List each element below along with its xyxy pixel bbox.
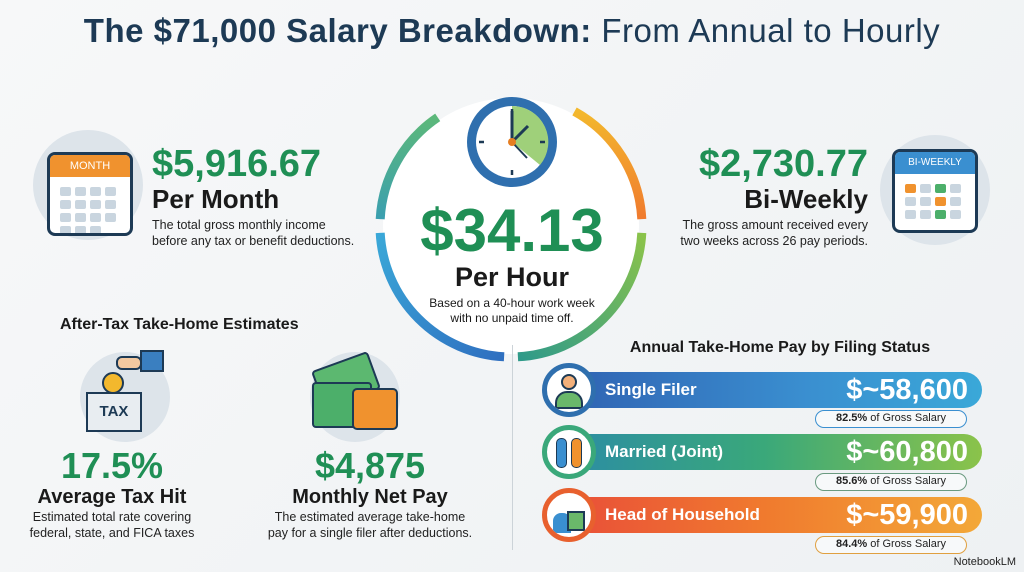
- hourly rate: [420, 197, 604, 325]
- heading: after-tax: After-Tax Take-Home Estimates: [60, 316, 299, 333]
- bar: married: Married (Joint): [605, 442, 723, 461]
- biweekly stat: The gross amount received every: [682, 218, 868, 232]
- monthly stat: $5,916.67: [152, 143, 321, 185]
- bar: married: [545, 434, 982, 470]
- title: The $71,000 Salary Breakdown: From Annual to Hourly: [84, 12, 940, 49]
- center ring: [376, 99, 646, 362]
- bar: single: $~58,600: [846, 374, 968, 406]
- monthly stat: [152, 143, 354, 248]
- pill: single: 82.5% of Gross Salary: [836, 412, 946, 424]
- monthly stat: Per Month: [152, 184, 279, 214]
- icon: wallet: [310, 352, 400, 442]
- bar: head: $~59,900: [846, 499, 968, 531]
- biweekly stat: [680, 143, 868, 248]
- stat: net pay: The estimated average take-home: [275, 510, 465, 524]
- stat: tax hit: [30, 445, 194, 540]
- stat: net pay: $4,875: [315, 445, 425, 486]
- bar: married: $~60,800: [846, 436, 968, 468]
- stat: net pay: pay for a single filer after deductions.: [268, 526, 472, 540]
- monthly stat: The total gross monthly income: [152, 218, 326, 232]
- hourly rate: with no unpaid time off.: [450, 311, 574, 325]
- pill: head: [815, 536, 967, 554]
- icon: tax box: [80, 352, 170, 442]
- biweekly stat: Bi-Weekly: [744, 184, 868, 214]
- hourly rate: Based on a 40-hour work week: [429, 296, 595, 310]
- pill: married: 85.6% of Gross Salary: [836, 475, 946, 487]
- stat: tax hit: 17.5%: [61, 445, 163, 486]
- bar: head: [545, 497, 982, 533]
- bar: single: Single Filer: [605, 380, 697, 399]
- brand: NotebookLM: [954, 556, 1016, 568]
- stat: tax hit: Average Tax Hit: [38, 486, 186, 508]
- hourly rate: Per Hour: [455, 262, 569, 292]
- icon: tax box: TAX: [100, 403, 128, 420]
- icon: month calendar: MONTH: [70, 160, 110, 172]
- biweekly stat: $2,730.77: [699, 143, 868, 185]
- stat: net pay: [268, 445, 472, 540]
- icon: biweekly calendar: BI-WEEKLY: [908, 157, 962, 168]
- pill: married: [815, 473, 967, 491]
- stat: net pay: Monthly Net Pay: [292, 486, 448, 508]
- stat: tax hit: Estimated total rate covering: [33, 510, 191, 524]
- biweekly stat: two weeks across 26 pay periods.: [680, 234, 868, 248]
- pill: head: 84.4% of Gross Salary: [836, 538, 946, 550]
- icon: clock: [467, 97, 557, 187]
- heading: filing status: Annual Take-Home Pay by Filing Status: [630, 339, 930, 356]
- stat: tax hit: federal, state, and FICA taxes: [30, 526, 194, 540]
- icon: biweekly calendar: [880, 135, 990, 245]
- bar: head: Head of Household: [605, 505, 760, 524]
- pill: single: [815, 410, 967, 428]
- monthly stat: before any tax or benefit deductions.: [152, 234, 354, 248]
- icon: month calendar: [33, 130, 143, 240]
- hourly rate: $34.13: [420, 197, 604, 264]
- bar: single: [545, 372, 982, 408]
